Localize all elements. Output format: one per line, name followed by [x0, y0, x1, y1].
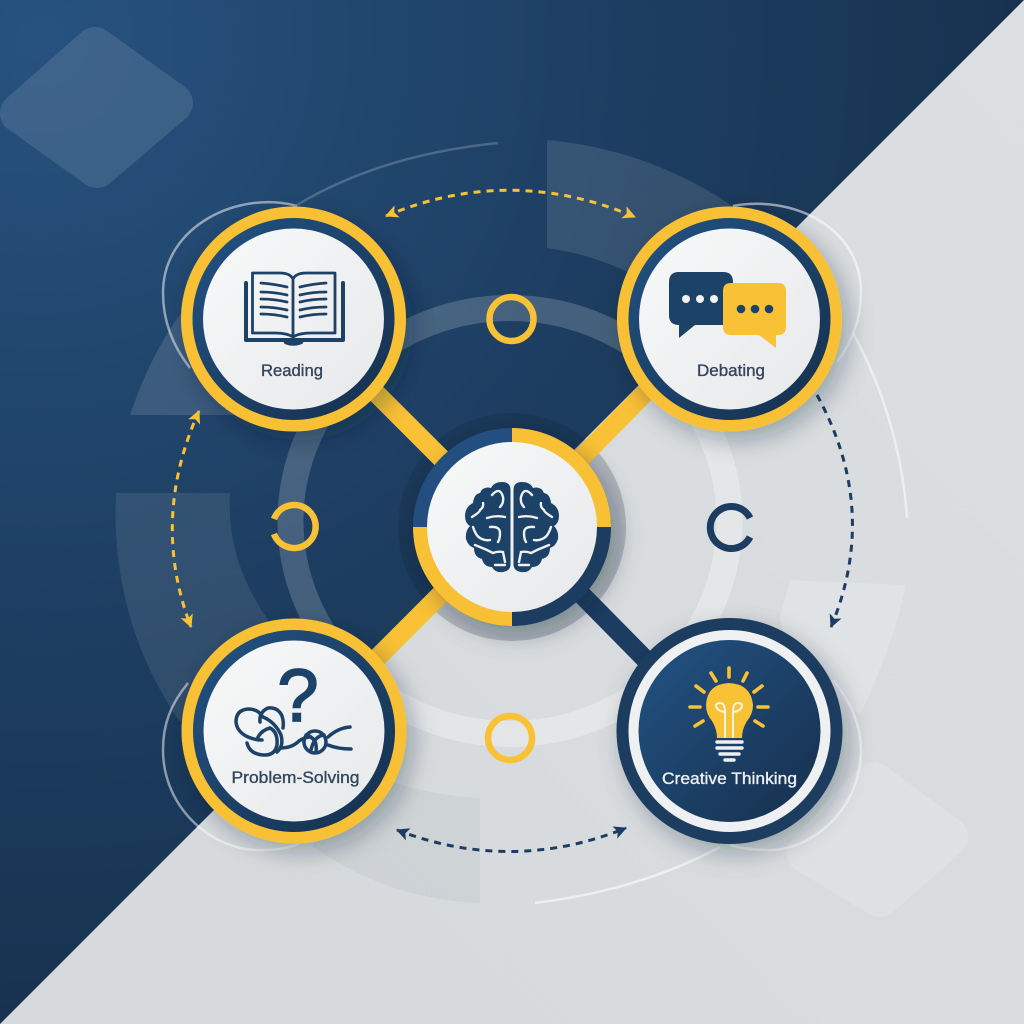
icon: brain	[465, 482, 559, 572]
node: Reading	[181, 206, 406, 432]
label: Creative Thinking	[662, 769, 797, 788]
icon: open book	[246, 273, 343, 344]
small ring markers	[274, 297, 750, 760]
hub shadow halo	[398, 413, 626, 641]
label: Debating	[697, 361, 765, 380]
icon: speech bubbles	[669, 272, 786, 348]
icon: question mark over tangled knot	[236, 654, 351, 755]
label: Problem-Solving	[232, 768, 360, 787]
label: Reading	[261, 361, 323, 380]
icon: light bulb	[690, 668, 768, 760]
hub: brain	[413, 428, 611, 626]
decorative background rings	[116, 140, 907, 903]
connectors from hub to nodes	[372, 388, 650, 663]
node: Debating	[617, 206, 842, 432]
node: Creative Thinking	[616, 618, 842, 844]
dashed cycle arrows	[172, 190, 852, 852]
hub segmented ring	[413, 428, 611, 626]
icon: question mark over tangled knot: ?	[277, 654, 319, 737]
decorative rounded diamonds	[20, 47, 948, 897]
node: Problem-Solving	[182, 618, 406, 844]
